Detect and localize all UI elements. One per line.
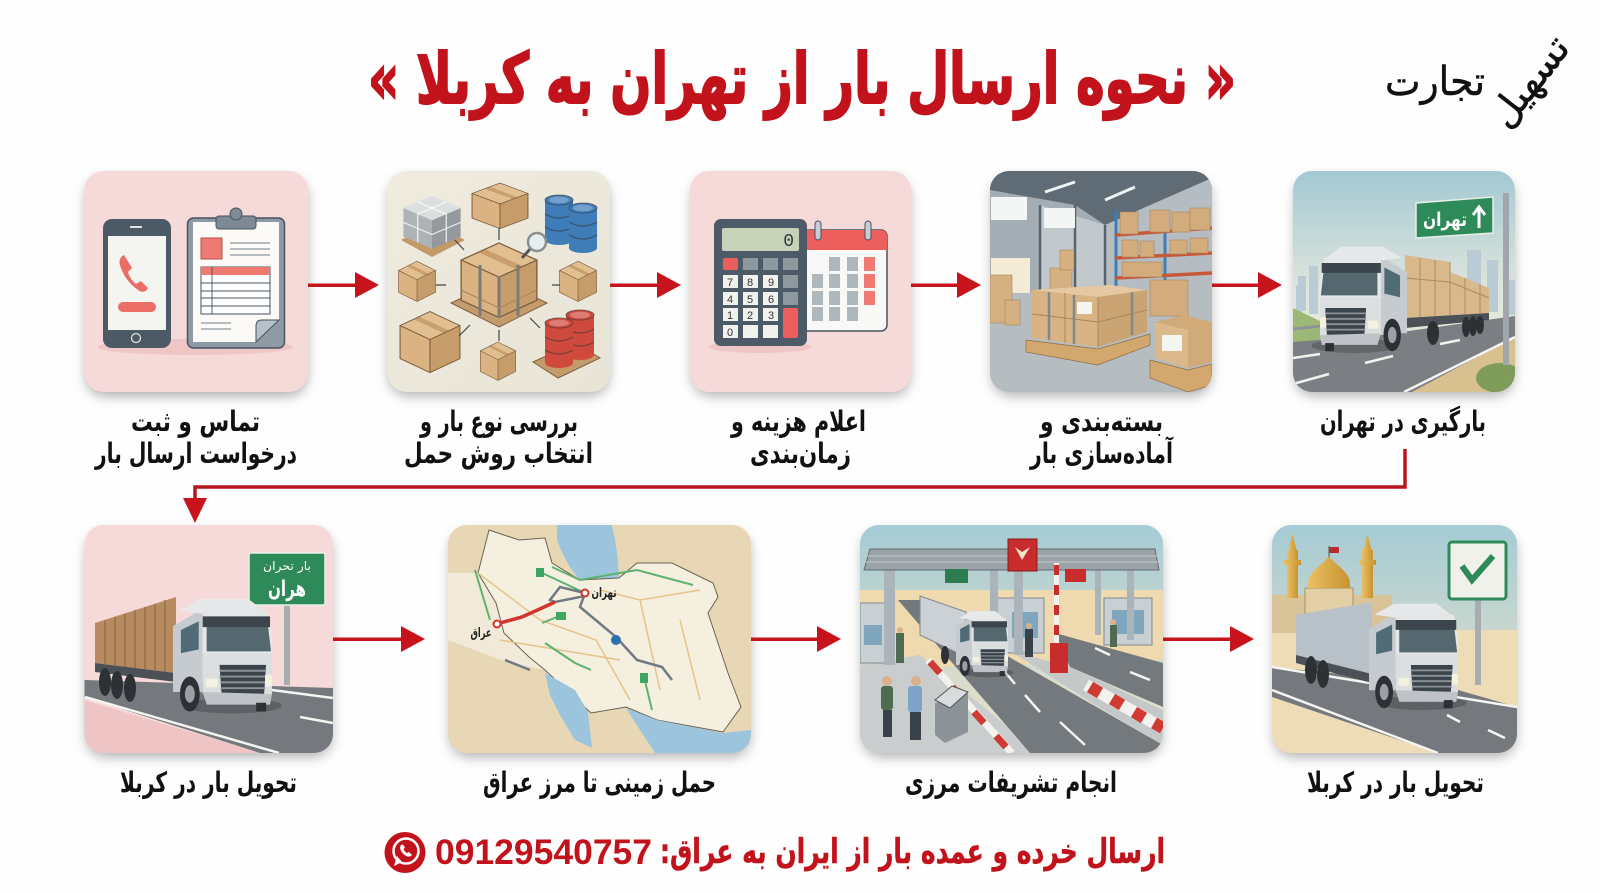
shrine [1272, 534, 1392, 633]
label: step 9: تحویل بار در کربلا [1307, 766, 1484, 799]
canopy and pillars [864, 539, 1159, 665]
back boxes [990, 250, 1074, 325]
label: step 3 line 2: زمان‌بندی [750, 437, 851, 470]
regional roads [478, 573, 700, 700]
map markers [494, 568, 648, 683]
road sign Mehran: هران [268, 577, 306, 602]
truck cab [1369, 604, 1467, 710]
barrier gate [1050, 563, 1068, 673]
gray routes [505, 587, 672, 680]
icon: calculator: 0 [727, 327, 733, 339]
label: step 1 line 2: درخواست ارسال بار [94, 437, 297, 470]
panel: step 2 cargo inspection [388, 171, 610, 396]
icon: side boxes [399, 261, 596, 380]
Iran land [478, 530, 741, 732]
label: step 2 line 2: انتخاب روش حمل [404, 437, 593, 470]
icon: blue barrels [545, 195, 597, 253]
small arrows [436, 228, 560, 341]
label: step 5: بارگیری در تهران [1320, 405, 1486, 438]
icon: calculator: 7 [727, 277, 733, 289]
container [95, 597, 176, 702]
icon: top box [472, 183, 528, 229]
label: step 8: انجام تشریفات مرزی [905, 766, 1117, 799]
map label Tehran: تهران [592, 586, 616, 601]
icon: calendar [800, 221, 887, 331]
truck cab [1311, 247, 1407, 353]
icon: central pallet [451, 243, 547, 327]
icon: calculator: 8 [747, 277, 753, 289]
arrow: row connector [183, 449, 1405, 523]
panel: step 4 warehouse packaging [990, 171, 1212, 396]
arrow: step 8 to 9 [1163, 626, 1254, 652]
footer text: ارسال خرده و عمده بار از ایران به عراق: [660, 832, 1165, 872]
icon: calculator: 5 [747, 294, 753, 306]
footer phone number: 09129540757 [435, 833, 652, 872]
panel: step 9 delivery in Karbala [1272, 525, 1517, 757]
label: step 4 line 1: بسته‌بندی و [1038, 405, 1163, 438]
semi trailer with cargo [1405, 255, 1489, 345]
label: step 4 line 2: آماده‌سازی بار [1029, 436, 1174, 470]
icon: calculator: 3 [768, 310, 774, 322]
inspection kiosk [935, 686, 968, 743]
road sign Tehran: تهران [1423, 209, 1467, 231]
icon: WhatsApp [384, 832, 426, 873]
label: step 2 line 1: بررسی نوع بار و [419, 405, 578, 438]
red route [496, 602, 555, 624]
border officers [881, 619, 1117, 740]
big strapped pallet [1026, 285, 1150, 365]
arrow: step 4 to 5 [1212, 272, 1282, 298]
storage shelves [1116, 208, 1212, 316]
icon: calculator: 2 [747, 310, 753, 322]
arrow: step 1 to 2 [308, 272, 379, 298]
icon: calculator: 9 [768, 277, 774, 289]
ground and road [860, 655, 1040, 753]
logo: Tashil Tejarat: تجارت [1385, 59, 1485, 105]
truck cab [173, 599, 282, 713]
label: step 3 line 1: اعلام هزینه و [730, 405, 866, 438]
panel: step 1 contact and request [84, 171, 308, 396]
guardrail [1293, 326, 1322, 329]
panel: step 5 loading in Tehran [1293, 171, 1524, 396]
arrow: step 2 to 3 [610, 272, 681, 298]
Iraq land [448, 573, 545, 670]
icon: calculator [714, 219, 807, 346]
booths [860, 598, 1152, 663]
arrow: step 6 to 7 [333, 626, 425, 652]
icon: calculator: 4 [727, 294, 733, 306]
title: « نحوه ارسال بار از تهران به کربلا » [368, 38, 1236, 120]
road sign Mehran [249, 553, 325, 685]
green routes [475, 567, 693, 710]
trailer [1296, 602, 1372, 688]
road [1272, 667, 1517, 753]
warehouse floor [990, 293, 1212, 392]
logo: Tashil Tejarat [1385, 27, 1579, 137]
label: step 6: تحویل بار در کربلا [120, 766, 297, 799]
arrow: step 7 to 8 [751, 626, 841, 652]
arrow: step 3 to 4 [911, 272, 981, 298]
road sign Tehran [1416, 193, 1509, 365]
windows and door [991, 197, 1075, 294]
label: step 7: حمل زمینی تا مرز عراق [483, 766, 716, 799]
icon: gray stacked pallet [401, 196, 465, 257]
icon: smartphone [103, 219, 171, 348]
red and white barriers [928, 660, 1163, 753]
front right box on pallet [1150, 315, 1212, 392]
icon: calculator: 0 [783, 232, 794, 252]
road sign Mehran: بار تحران [263, 559, 311, 574]
Caspian Sea [557, 525, 619, 581]
check sign [1449, 542, 1506, 685]
road [84, 680, 333, 753]
icon: magnifier [522, 233, 546, 258]
skyline [1296, 250, 1515, 315]
Persian Gulf and Sea of Oman [545, 673, 751, 753]
panel: step 3 cost and schedule [690, 171, 911, 396]
map label Iraq: عراق [470, 626, 492, 641]
icon: red barrels on pallet [533, 310, 600, 378]
panel: step 7 route map [448, 525, 751, 757]
panel: step 8 border formalities [860, 525, 1163, 757]
icon: clipboard form [188, 208, 284, 348]
truck [920, 596, 1013, 677]
grass and sand [1293, 308, 1524, 393]
logo: Tashil Tejarat: تسهیل [1480, 27, 1579, 137]
icon: calculator: 6 [768, 294, 774, 306]
icon: calculator: 1 [727, 310, 733, 322]
label: step 1 line 1: تماس و ثبت [131, 405, 260, 438]
road [1293, 316, 1515, 392]
panel: step 6 delivery truck with Mehran sign [84, 525, 333, 757]
